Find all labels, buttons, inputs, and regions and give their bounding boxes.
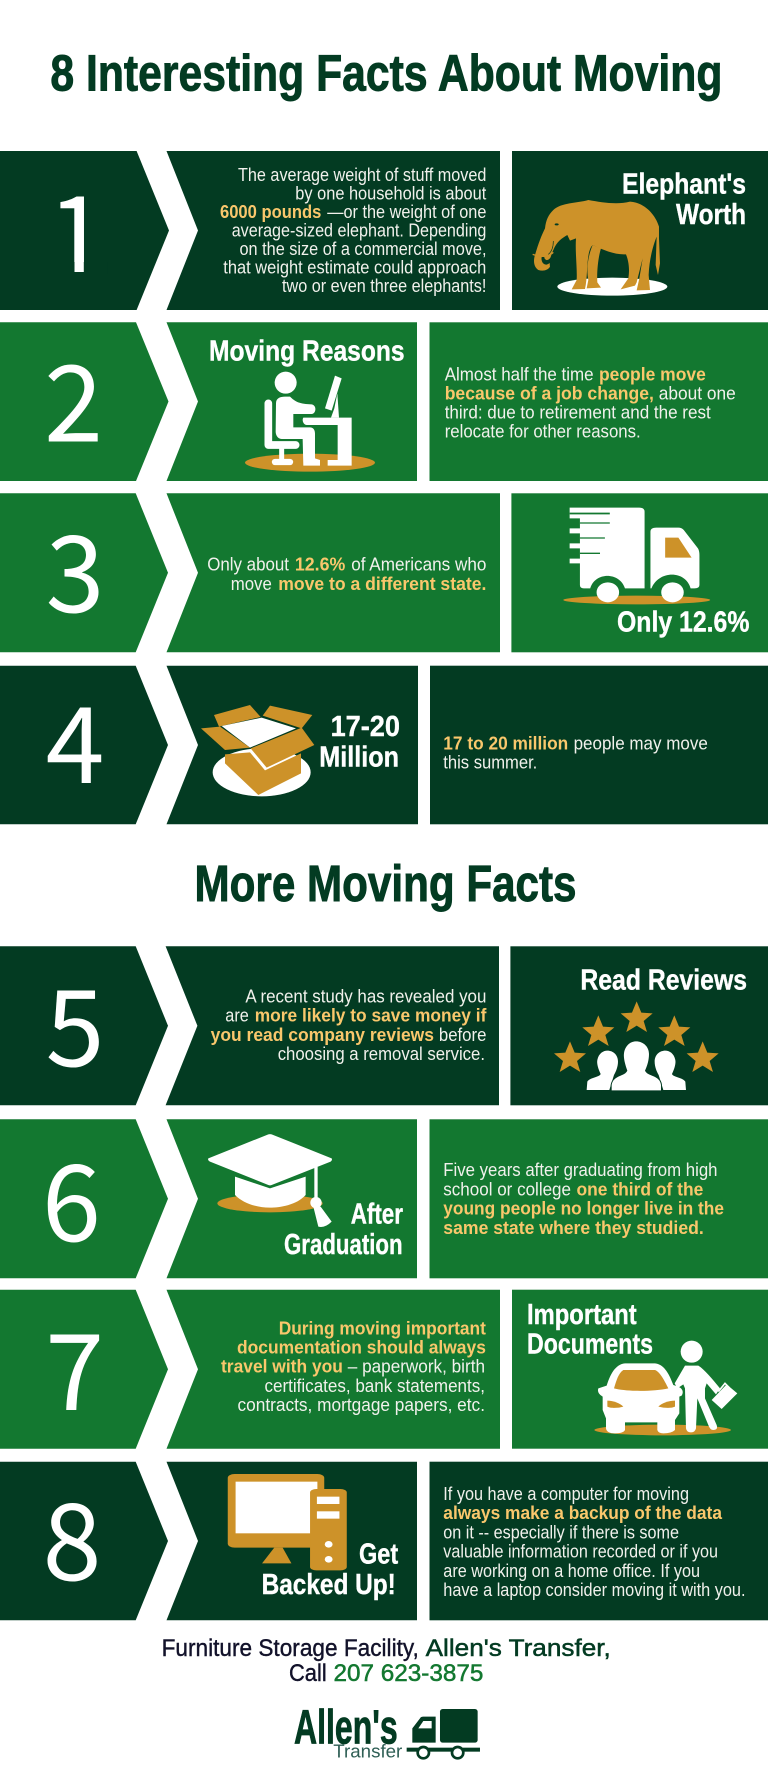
icon: logo truck (407, 1709, 480, 1758)
number chevron 1: 1 (48, 149, 106, 303)
text panel 5: you read company reviews (211, 1025, 434, 1045)
text panel 5: A recent study has revealed you (245, 987, 486, 1007)
icon: person at desk (245, 372, 375, 472)
text panel 2: about one (659, 383, 736, 403)
icon: graduation cap (208, 1134, 332, 1227)
text panel 2: people move (599, 364, 706, 384)
icon panel: important documents: Important (527, 1299, 637, 1331)
number chevron 1 (0, 149, 169, 310)
footer contact text: Call (289, 1660, 327, 1687)
text panel 1: that weight estimate could approach (223, 257, 486, 277)
icon: open box (201, 705, 314, 796)
panel: fact 7 (0, 1287, 768, 1449)
panel: fact 5 (0, 943, 768, 1105)
text panel 3: Only about (207, 555, 289, 575)
number chevron 5: 5 (46, 943, 104, 1097)
icon panel: after graduation: Graduation (284, 1229, 403, 1261)
text panel 5: before (439, 1025, 486, 1045)
text panel 7: contracts, mortgage papers, etc. (238, 1395, 485, 1415)
number chevron 6 (0, 1118, 168, 1278)
text panel 2: third: due to retirement and the rest (445, 403, 711, 423)
text panel 3: move to a different state. (278, 574, 486, 594)
icon panel: only 12.6%: Only 12.6% (617, 607, 750, 639)
text panel 1: The average weight of stuff moved (238, 165, 486, 185)
logo: Allen's Transfer: Allen's (294, 1701, 398, 1754)
number chevron 2: 2 (44, 319, 103, 473)
text panel 3: of Americans who (351, 555, 486, 575)
text panel 3: move (231, 574, 272, 594)
icon panel: read reviews (510, 946, 768, 1105)
icon: car and person with briefcase (594, 1341, 737, 1435)
text panel 6: same state where they studied. (443, 1218, 704, 1238)
text panel 8: are working on a home office. If you (443, 1561, 700, 1581)
section heading: More Moving Facts (194, 855, 576, 912)
number chevron 4: 4 (46, 660, 104, 814)
panel: fact 8 (0, 1457, 768, 1620)
text panel 4: 17 to 20 million (443, 733, 568, 753)
text panel 8: have a laptop consider moving it with you. (443, 1580, 746, 1600)
panel: fact 6 (0, 1118, 768, 1278)
number chevron 6: 6 (42, 1118, 101, 1272)
text panel 4 (430, 666, 768, 824)
icon panel: moving reasons (166, 322, 417, 481)
icon: moving truck (563, 508, 710, 604)
text panel 2 (430, 322, 768, 481)
icon panel: get backed up (166, 1462, 417, 1620)
number chevron 3: 3 (46, 489, 104, 643)
logo: Allen's Transfer: Transfer (333, 1740, 402, 1761)
text panel 7 (166, 1290, 500, 1449)
icon panel: important documents: Documents (527, 1328, 653, 1360)
text panel 8: valuable information recorded or if you (443, 1542, 718, 1562)
footer contact text: Furniture Storage Facility, (162, 1635, 419, 1662)
text panel 7: travel with you (221, 1357, 343, 1377)
text panel 1: on the size of a commercial move, (240, 239, 486, 259)
text panel 5 (166, 946, 499, 1105)
icon panel: 17-20 million (166, 666, 418, 824)
footer contact text: Allen's Transfer, (426, 1635, 611, 1662)
number chevron 2 (0, 319, 168, 481)
panel: fact 2 (0, 319, 768, 481)
footer contact text (162, 1635, 611, 1687)
text panel 8: on it -- especially if there is some (443, 1522, 679, 1542)
icon panel: 17-20 million: 17-20 (331, 711, 400, 743)
text panel 8: always make a backup of the data (443, 1503, 723, 1523)
panel: fact 4 (0, 660, 768, 824)
text panel 2: because of a job change, (445, 383, 654, 403)
icon panel: after graduation (166, 1119, 417, 1278)
text panel 1: 6000 pounds (220, 202, 321, 222)
text panel 3: 12.6% (295, 555, 345, 575)
icon: elephant (533, 200, 667, 296)
icon panel: moving reasons: Moving Reasons (209, 336, 405, 368)
text panel 1: two or even three elephants! (282, 276, 486, 296)
text panel 6: school or college (443, 1179, 571, 1199)
number chevron 8: 8 (43, 1457, 101, 1611)
text panel 5: are (225, 1006, 249, 1026)
text panel 1: —or the weight of one (327, 202, 486, 222)
text panel 8: If you have a computer for moving (443, 1484, 689, 1504)
text panel 7: certificates, bank statements, (264, 1376, 485, 1396)
text panel 2: relocate for other reasons. (445, 422, 641, 442)
icon: stars and people (554, 1001, 719, 1090)
text panel 6: young people no longer live in the (443, 1199, 724, 1219)
icon panel: only 12.6% (511, 493, 768, 652)
text panel 3 (166, 493, 500, 652)
number chevron 5 (0, 943, 168, 1105)
text panel 7: During moving important (279, 1318, 486, 1338)
number chevron 8 (0, 1457, 168, 1620)
icon panel: elephant's worth (512, 151, 768, 310)
number chevron 7 (0, 1287, 168, 1449)
icon panel: 17-20 million: Million (319, 742, 399, 774)
footer contact text: 207 623-3875 (334, 1660, 483, 1687)
icon: desktop computer (228, 1474, 347, 1570)
text panel 7: – paperwork, birth (348, 1357, 485, 1377)
icon panel: elephant's worth: Elephant's (622, 168, 746, 200)
icon panel: after graduation: After (351, 1198, 403, 1230)
text panel 8 (430, 1462, 768, 1620)
text panel 7: documentation should always (237, 1337, 486, 1357)
icon panel: get backed up: Backed Up! (262, 1569, 396, 1601)
text panel 6: Five years after graduating from high (443, 1160, 718, 1180)
text panel 5: choosing a removal service. (278, 1044, 485, 1064)
panel: fact 1 (0, 149, 768, 310)
text panel 1: average-sized elephant. Depending (232, 220, 486, 240)
icon panel: important documents (512, 1290, 768, 1449)
text panel 1 (166, 151, 500, 310)
number chevron 3 (0, 489, 168, 652)
text panel 6 (430, 1119, 768, 1278)
text panel 6: one third of the (576, 1179, 703, 1199)
icon panel: get backed up: Get (359, 1538, 398, 1570)
text panel 2: Almost half the time (445, 364, 594, 384)
icon panel: elephant's worth: Worth (676, 199, 746, 231)
panel: fact 3 (0, 489, 768, 652)
text panel 1: by one household is about (295, 184, 486, 204)
number chevron 7: 7 (45, 1287, 104, 1441)
number chevron 4 (0, 660, 168, 824)
text panel 4: this summer. (443, 753, 537, 773)
text panel 5: more likely to save money if (255, 1006, 487, 1026)
text panel 4: people may move (574, 733, 708, 753)
